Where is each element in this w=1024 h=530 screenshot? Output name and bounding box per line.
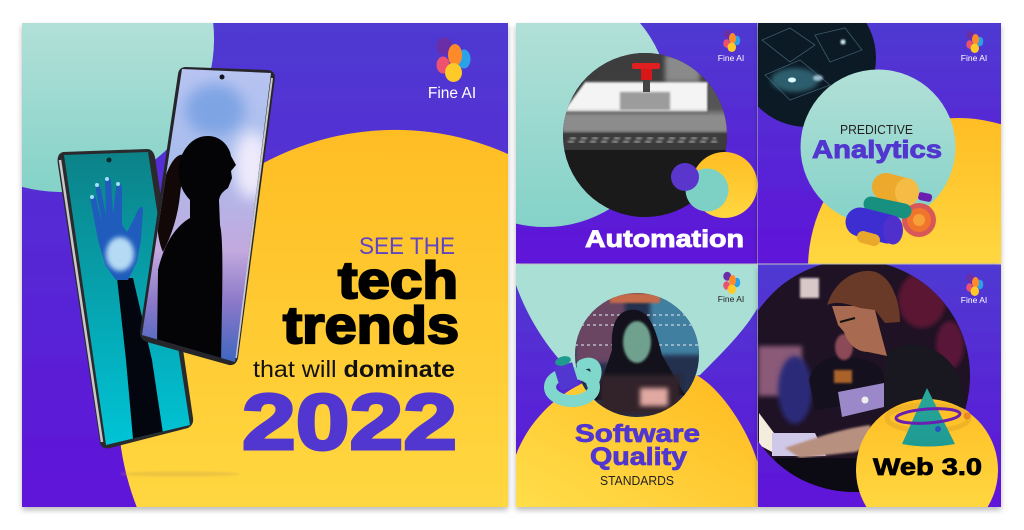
panel: Predictive Analytics bbox=[754, 22, 1004, 268]
heading: see the tech trends 2022: tech bbox=[338, 252, 458, 310]
logo: Fine AI: Fine AI bbox=[961, 53, 987, 63]
heading: see the tech trends 2022: that will dominate bbox=[253, 356, 455, 382]
heading: Software Quality Standards: STANDARDS bbox=[600, 473, 674, 488]
panel: Web 3.0 bbox=[735, 255, 1001, 507]
heading: Predictive Analytics: Analytics bbox=[812, 136, 942, 164]
heading: Software Quality Standards: Software bbox=[575, 420, 700, 448]
decoration: spheres bbox=[671, 152, 758, 218]
heading: see the tech trends 2022 bbox=[242, 233, 459, 466]
panel: main tech trends poster bbox=[22, 23, 508, 507]
circle: yellow title badge bbox=[856, 399, 998, 507]
phone: robot hand bbox=[58, 149, 193, 450]
heading: Automation: Automation bbox=[585, 226, 744, 253]
heading: Software Quality Standards: Quality bbox=[590, 443, 687, 471]
heading: see the tech trends 2022: 2022 bbox=[242, 377, 457, 466]
heading: Predictive Analytics bbox=[812, 122, 942, 164]
photo: developer at laptop bbox=[758, 264, 970, 492]
logo: Fine AI bbox=[961, 31, 987, 63]
panel: Automation bbox=[516, 23, 758, 264]
logo: Fine AI: Fine AI bbox=[718, 53, 744, 63]
photo: dark network bbox=[758, 23, 876, 127]
phone: woman silhouette bbox=[140, 67, 275, 365]
logo: Fine AI large bbox=[428, 38, 476, 102]
heading: Software Quality Standards bbox=[575, 420, 700, 488]
logo: Fine AI: Fine AI bbox=[718, 294, 744, 304]
heading: see the tech trends 2022: SEE THE bbox=[359, 233, 455, 260]
heading: Web 3.0: Web 3.0 bbox=[873, 454, 982, 481]
circle: mint title badge bbox=[800, 70, 956, 224]
photo: circuit board machine bbox=[560, 50, 730, 220]
logo: Fine AI bbox=[718, 272, 744, 304]
icon: cone with orbit ring bbox=[887, 388, 970, 446]
icon: 3D cylinders bbox=[860, 178, 936, 244]
photo: woman with code projection bbox=[575, 293, 699, 417]
panel: Software Quality Standards bbox=[516, 264, 758, 507]
logo: Fine AI bbox=[718, 30, 744, 63]
heading: see the tech trends 2022: trends bbox=[283, 297, 459, 355]
heading: Predictive Analytics: PREDICTIVE bbox=[840, 122, 913, 137]
icon: torus with cylinder bbox=[550, 355, 596, 401]
logo: Fine AI large: Fine AI bbox=[428, 85, 476, 102]
logo: Fine AI bbox=[961, 274, 987, 305]
logo: Fine AI: Fine AI bbox=[961, 295, 987, 305]
